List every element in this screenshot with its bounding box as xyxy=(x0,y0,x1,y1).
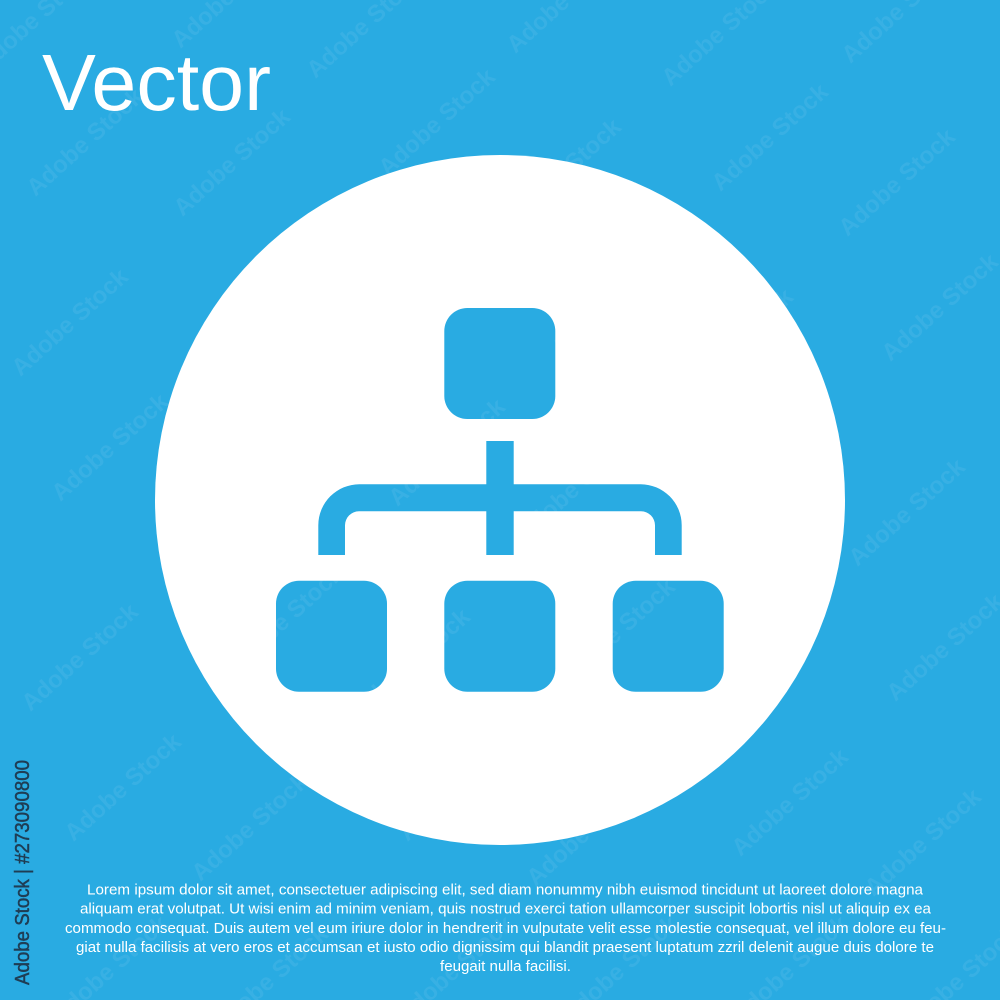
top node xyxy=(444,308,555,419)
description text block: aliquam erat volutpat. Ut wisi enim ad minim veniam, quis nostrud exerci tation ullamcorper suscipit lobortis nisl ut aliquip ex ea xyxy=(80,902,932,918)
description text block xyxy=(65,882,946,975)
connector lines xyxy=(318,441,682,555)
watermark pattern: Adobe Stock xyxy=(876,248,1000,367)
stock id, vertical text: Adobe Stock | #273090800 xyxy=(12,760,34,985)
watermark pattern: Adobe Stock xyxy=(706,78,834,197)
watermark pattern: Adobe Stock xyxy=(511,428,639,547)
watermark pattern: Adobe Stock xyxy=(16,598,144,717)
watermark pattern: Adobe Stock xyxy=(859,783,987,902)
watermark pattern: Adobe Stock xyxy=(46,388,174,507)
watermark pattern: Adobe Stock xyxy=(681,613,809,732)
description text block: feugait nulla facilisi. xyxy=(440,959,571,975)
watermark pattern: Adobe Stock xyxy=(59,728,187,847)
watermark pattern: Adobe Stock xyxy=(671,283,799,402)
watermark pattern: Adobe Stock xyxy=(338,273,466,392)
white circle panel xyxy=(155,155,845,845)
watermark pattern: Adobe Stock xyxy=(221,560,349,679)
bottom middle node xyxy=(444,581,555,692)
watermark pattern: Adobe Stock xyxy=(521,773,649,892)
watermark pattern: Adobe Stock xyxy=(6,263,134,382)
watermark pattern: Adobe Stock xyxy=(211,230,339,349)
bottom left node xyxy=(276,581,387,692)
watermark pattern: Adobe Stock xyxy=(383,393,511,512)
watermark pattern: Adobe Stock xyxy=(716,418,844,537)
watermark pattern: Adobe Stock xyxy=(843,453,971,572)
description text block: giat nulla facilisis at vero eros et accumsan et iusto odio dignissim qui blandit praesent luptatum zzril delenit augue duis dolore te xyxy=(76,940,934,956)
watermark pattern: Adobe Stock xyxy=(178,428,306,547)
icon: hierarchy chart xyxy=(276,308,724,692)
watermark pattern: Adobe Stock xyxy=(186,768,314,887)
watermark pattern: Adobe Stock xyxy=(553,573,681,692)
watermark pattern: Adobe Stock xyxy=(726,743,854,862)
title: Vector xyxy=(42,38,271,127)
watermark pattern: Adobe Stock xyxy=(499,113,627,232)
watermark pattern: Adobe Stock xyxy=(546,243,674,362)
watermark pattern: Adobe Stock xyxy=(21,83,149,202)
description text block: Lorem ipsum dolor sit amet, consectetuer adipiscing elit, sed diam nonummy nibh euismod tincidunt ut laoreet dolore magna xyxy=(87,882,924,898)
bottom right node xyxy=(613,581,724,692)
watermark pattern: Adobe Stock xyxy=(833,123,961,242)
description text block: commodo consequat. Duis autem vel eum iriure dolor in hendrerit in vulputate velit esse molestie consequat, vel illum dolore eu feu- xyxy=(65,921,946,937)
watermark pattern: Adobe Stock xyxy=(348,603,476,722)
watermark pattern: Adobe Stock xyxy=(373,63,501,182)
watermark pattern: Adobe Stock xyxy=(168,103,296,222)
watermark pattern: Adobe Stock xyxy=(393,728,521,847)
